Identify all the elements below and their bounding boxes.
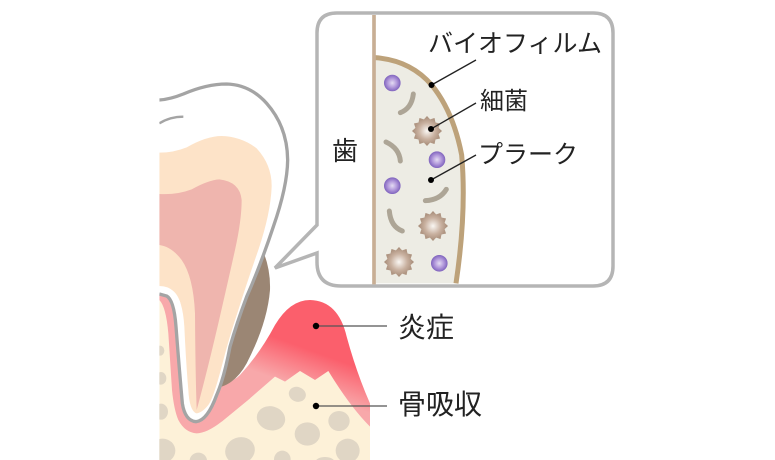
alveolar bone <box>150 297 370 460</box>
speech bubble <box>275 13 613 286</box>
gum around root <box>159 295 250 433</box>
enamel highlight <box>159 117 183 123</box>
biofilm edge <box>375 58 463 283</box>
leader lines <box>313 60 476 409</box>
plaque body <box>375 58 463 283</box>
label: plaque: プラーク <box>478 141 578 169</box>
label: tooth: 歯 <box>332 136 358 166</box>
tooth and gum illustration <box>150 84 370 460</box>
tooth body <box>176 254 262 420</box>
cocci bacteria <box>384 75 447 271</box>
inflamed gum <box>217 300 370 427</box>
label: biofilm: バイオフィルム <box>428 30 602 58</box>
label: bone resorption: 骨吸収 <box>398 389 482 420</box>
pulp <box>159 179 242 410</box>
label: bacteria: 細菌 <box>480 88 528 115</box>
plaque on root <box>222 256 270 387</box>
white band inside root <box>178 298 196 414</box>
biofilm magnified detail <box>374 15 463 284</box>
spiky bacteria <box>384 116 448 277</box>
label: inflammation: 炎症 <box>398 312 454 343</box>
dentin <box>159 136 272 413</box>
tooth outline <box>159 84 288 422</box>
rod bacteria <box>386 94 446 231</box>
tooth surface line <box>368 15 379 284</box>
